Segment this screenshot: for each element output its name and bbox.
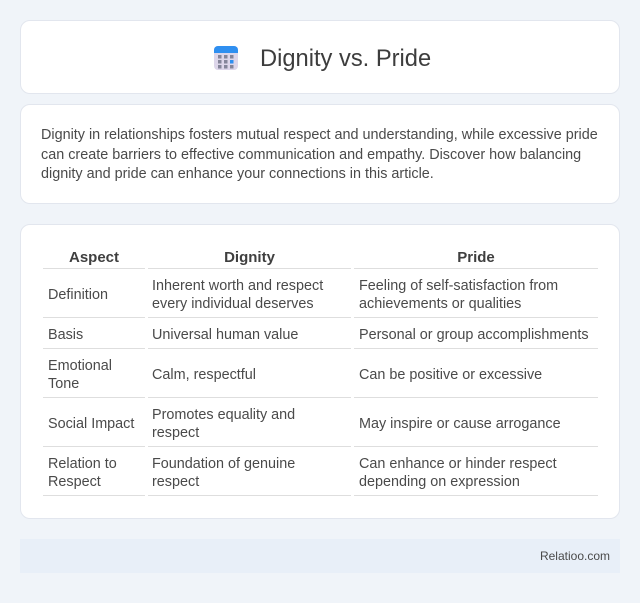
- panel: comparison table: depending on expression: [359, 474, 520, 490]
- row: Definition: Definition: [48, 287, 108, 303]
- title: Dignity vs. Pride: [260, 46, 431, 72]
- panel: comparison table: Feeling of self-satisfaction from: [359, 278, 558, 294]
- panel: comparison table: Can be positive or excessive: [359, 367, 542, 383]
- row: Basis: Basis: [48, 327, 83, 343]
- panel: comparison table: May inspire or cause arrogance: [359, 416, 561, 432]
- panel: comparison table: respect: [152, 474, 199, 490]
- column heading: Pride: Pride: [457, 249, 495, 266]
- column heading: Dignity: Dignity: [224, 249, 275, 266]
- panel: introduction: [20, 104, 620, 204]
- row: Relation to Respect: [48, 456, 117, 490]
- panel: comparison table: every individual deserves: [152, 296, 314, 312]
- panel: comparison table: respect: [152, 425, 199, 441]
- panel: title card: [20, 20, 620, 94]
- row: Relation to Respect: Relation to: [48, 456, 117, 472]
- row: Relation to Respect: Respect: [48, 474, 101, 490]
- row: Emotional Tone: Emotional: [48, 358, 112, 374]
- row: Social Impact: Social Impact: [48, 416, 134, 432]
- panel: comparison table: [20, 224, 620, 519]
- panel: comparison table: Foundation of genuine: [152, 456, 295, 472]
- panel: comparison table: Can enhance or hinder respect: [359, 456, 557, 472]
- panel: comparison table: Universal human value: [152, 327, 298, 343]
- icon: calendar: [214, 46, 238, 70]
- panel: comparison table: Promotes equality and: [152, 407, 295, 423]
- panel: comparison table: Calm, respectful: [152, 367, 256, 383]
- footer brand text: Relatioo.com: [540, 549, 610, 563]
- intro text: [41, 127, 598, 182]
- panel: comparison table: Personal or group accomplishments: [359, 327, 589, 343]
- footer bar: [20, 539, 620, 573]
- intro text: can create barriers to effective communication and empathy. Discover how balancing: [41, 147, 581, 163]
- intro text: dignity and pride can enhance your connections in this article.: [41, 166, 434, 182]
- panel: comparison table: achievements or qualities: [359, 296, 521, 312]
- column heading: Aspect: Aspect: [69, 249, 119, 266]
- row: Emotional Tone: [48, 358, 112, 392]
- intro text: Dignity in relationships fosters mutual respect and understanding, while excessive pride: [41, 127, 598, 143]
- panel: comparison table: Inherent worth and respect: [152, 278, 323, 294]
- row: Emotional Tone: Tone: [48, 376, 79, 392]
